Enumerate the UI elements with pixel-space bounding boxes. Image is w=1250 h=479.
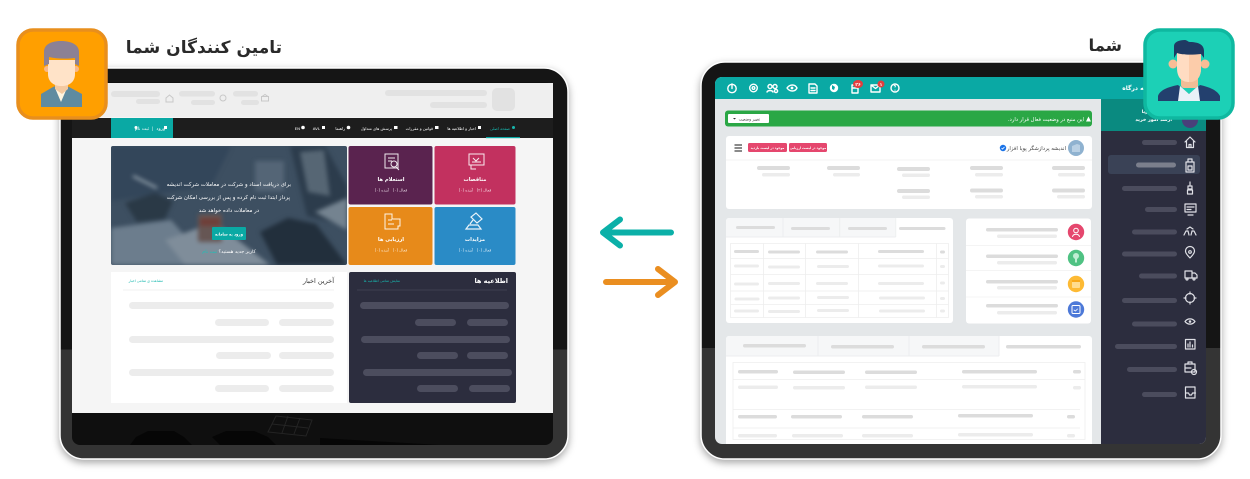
card: auctions: فعال (۰) آینده (۰) <box>459 248 491 252</box>
dashboard screen background <box>715 77 1206 444</box>
status bar: تغییر وضعیت <box>739 116 760 122</box>
notification badge 26 <box>853 80 863 88</box>
panel: announcements: نمایش تمامی اطلاعیه ها <box>364 279 400 283</box>
portal navigation bar: AVL <box>313 126 321 131</box>
sidebar profile header: پویا <box>1142 109 1150 115</box>
stats card <box>966 218 1091 324</box>
inner table grid <box>730 244 948 318</box>
icon: calendar <box>1068 276 1084 292</box>
table card with tabs <box>726 218 953 323</box>
left tablet: supplier portal <box>60 68 568 459</box>
portal navigation bar <box>72 118 553 138</box>
icon: person <box>1068 224 1084 240</box>
avatar: supplier <box>18 30 106 118</box>
sidebar profile header: ارشد امور خرید <box>1135 117 1172 123</box>
portal navigation bar: EN <box>295 126 300 131</box>
card: tenders: مناقصات <box>464 177 486 183</box>
right tablet: your dashboard <box>701 62 1221 459</box>
avatar: you <box>1145 30 1233 118</box>
sidebar icons <box>1184 137 1197 398</box>
company name <box>1000 140 1084 156</box>
login button <box>212 227 246 240</box>
card: auctions <box>434 207 516 265</box>
company name: اندیشه پردازشگر پویا افزار <box>1006 145 1066 152</box>
portal navigation bar: راهنما <box>335 126 345 131</box>
dashboard top bar: به درگاه <box>1122 84 1146 92</box>
status bar: این منبع در وضعیت فعال قرار دارد. <box>1008 117 1084 123</box>
hero banner <box>111 146 347 265</box>
card: evaluations: ارزیابی ها <box>378 237 404 243</box>
status bar <box>725 110 1092 126</box>
top bar icons <box>728 84 899 93</box>
sidebar <box>1101 99 1206 444</box>
tablet frame <box>60 68 568 459</box>
hero banner: کاربر جدید هستید؟ ثبت نام <box>202 249 256 255</box>
heading: your suppliers: تامین کنندگان شما <box>126 37 282 58</box>
tablet frame <box>701 62 1221 459</box>
badge: approved list: موجود در لیست بازدید <box>751 146 784 150</box>
card: inquiries <box>348 146 432 204</box>
card: tenders: فعال (۲) آینده (۰) <box>459 188 491 192</box>
menu icon <box>734 145 742 151</box>
sidebar profile header <box>1101 99 1206 131</box>
portal navigation bar: ورود | ثبت نام <box>135 126 165 132</box>
panel: latest news: آخرین اخبار <box>302 276 335 285</box>
nav item icons <box>301 126 515 129</box>
icon: task <box>1068 301 1084 318</box>
company info card <box>726 136 1092 209</box>
arrow: orange pointing right <box>606 269 675 295</box>
portal navigation bar: صفحه اصلی <box>490 126 511 131</box>
lower screen dark area <box>72 82 553 445</box>
portal navigation bar: اخبار و اطلاعیه ها <box>447 126 476 131</box>
badge: evaluation list: موجود در لیست ارزیابی <box>790 146 826 150</box>
login button: ورود به سامانه <box>215 232 244 236</box>
hero banner: برای دریافت اسناد و شرکت در معاملات شرکت اندیشه <box>167 181 291 188</box>
card: evaluations <box>348 207 432 265</box>
badge: evaluation list <box>789 143 827 152</box>
heading: you: شما <box>1089 36 1122 55</box>
active menu row <box>1108 155 1200 174</box>
notification badge 1: ۱ <box>880 83 882 88</box>
teal button icons <box>134 126 167 129</box>
icon: bulb <box>1068 250 1084 266</box>
notification badge 1 <box>878 80 884 88</box>
portal header <box>72 83 553 117</box>
portal screen <box>72 83 553 413</box>
panel: latest news: مشاهده ی تمامی اخبار <box>128 279 163 283</box>
badge: approved list <box>748 143 787 152</box>
card: inquiries: استعلام ها <box>377 177 405 183</box>
panel: announcements: اطلاعیه ها <box>474 277 508 285</box>
portal navigation bar: قوانین و مقررات <box>406 126 433 131</box>
bottom table card <box>726 336 1092 444</box>
notification badge 26: ۲۶ <box>855 82 861 88</box>
card: inquiries: فعال (۰) آینده (۰) <box>375 188 407 192</box>
panel: latest news <box>111 272 347 403</box>
portal navigation bar: پرسش های متداول <box>361 126 392 131</box>
card: evaluations: فعال (۰) آینده (۰) <box>375 248 407 252</box>
hero banner: در معاملات داده خواهد شد <box>199 208 260 214</box>
hero banner: پرداز ابتدا ثبت نام کرده و پس از بررسی امکان شرکت <box>167 194 290 201</box>
panel: announcements <box>349 272 516 403</box>
arrow: teal pointing left <box>603 220 671 246</box>
card: tenders <box>434 146 516 204</box>
inner table grid <box>733 362 1085 440</box>
dashboard top bar <box>715 77 1206 99</box>
card: auctions: مزایدات <box>465 237 485 243</box>
